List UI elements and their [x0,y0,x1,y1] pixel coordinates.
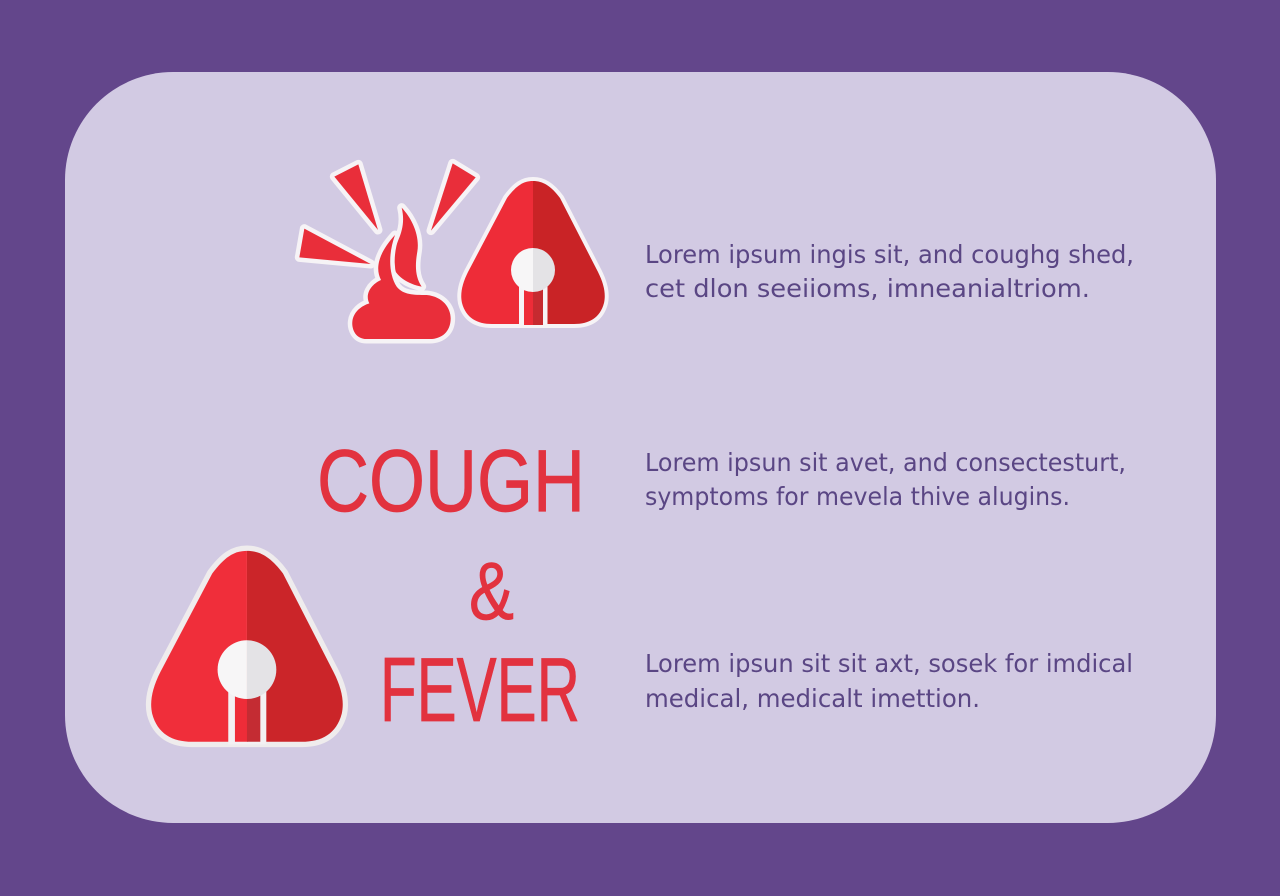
icon: warning triangle small [461,181,605,325]
spike: left [299,229,371,264]
icon: cough burst [299,163,476,339]
title: ampersand: & [469,546,514,637]
text block: second description [645,448,1126,511]
flame: right [392,208,422,287]
spike: top right [431,163,476,231]
text block: second description: symptoms for mevela thive alugins. [645,482,1070,511]
title: fever: FEVER [380,640,580,741]
icon: warning triangle large [151,551,343,744]
text block: third description: Lorem ipsun sit sit axt, sosek for imdical [645,649,1133,678]
text block: first description: cet dlon seeiioms, imneanialtriom. [645,274,1090,303]
text block: third description [645,649,1133,713]
text block: first description [645,240,1134,303]
title: cough: COUGH [317,431,585,530]
cough cloud [352,235,451,339]
text block: first description: Lorem ipsum ingis sit, and coughg shed, [645,240,1134,269]
text block: second description: Lorem ipsun sit avet, and consectesturt, [645,448,1126,477]
spike: top left [334,164,378,230]
panel: main card [65,72,1216,823]
text block: third description: medical, medicalt imettion. [645,684,980,713]
